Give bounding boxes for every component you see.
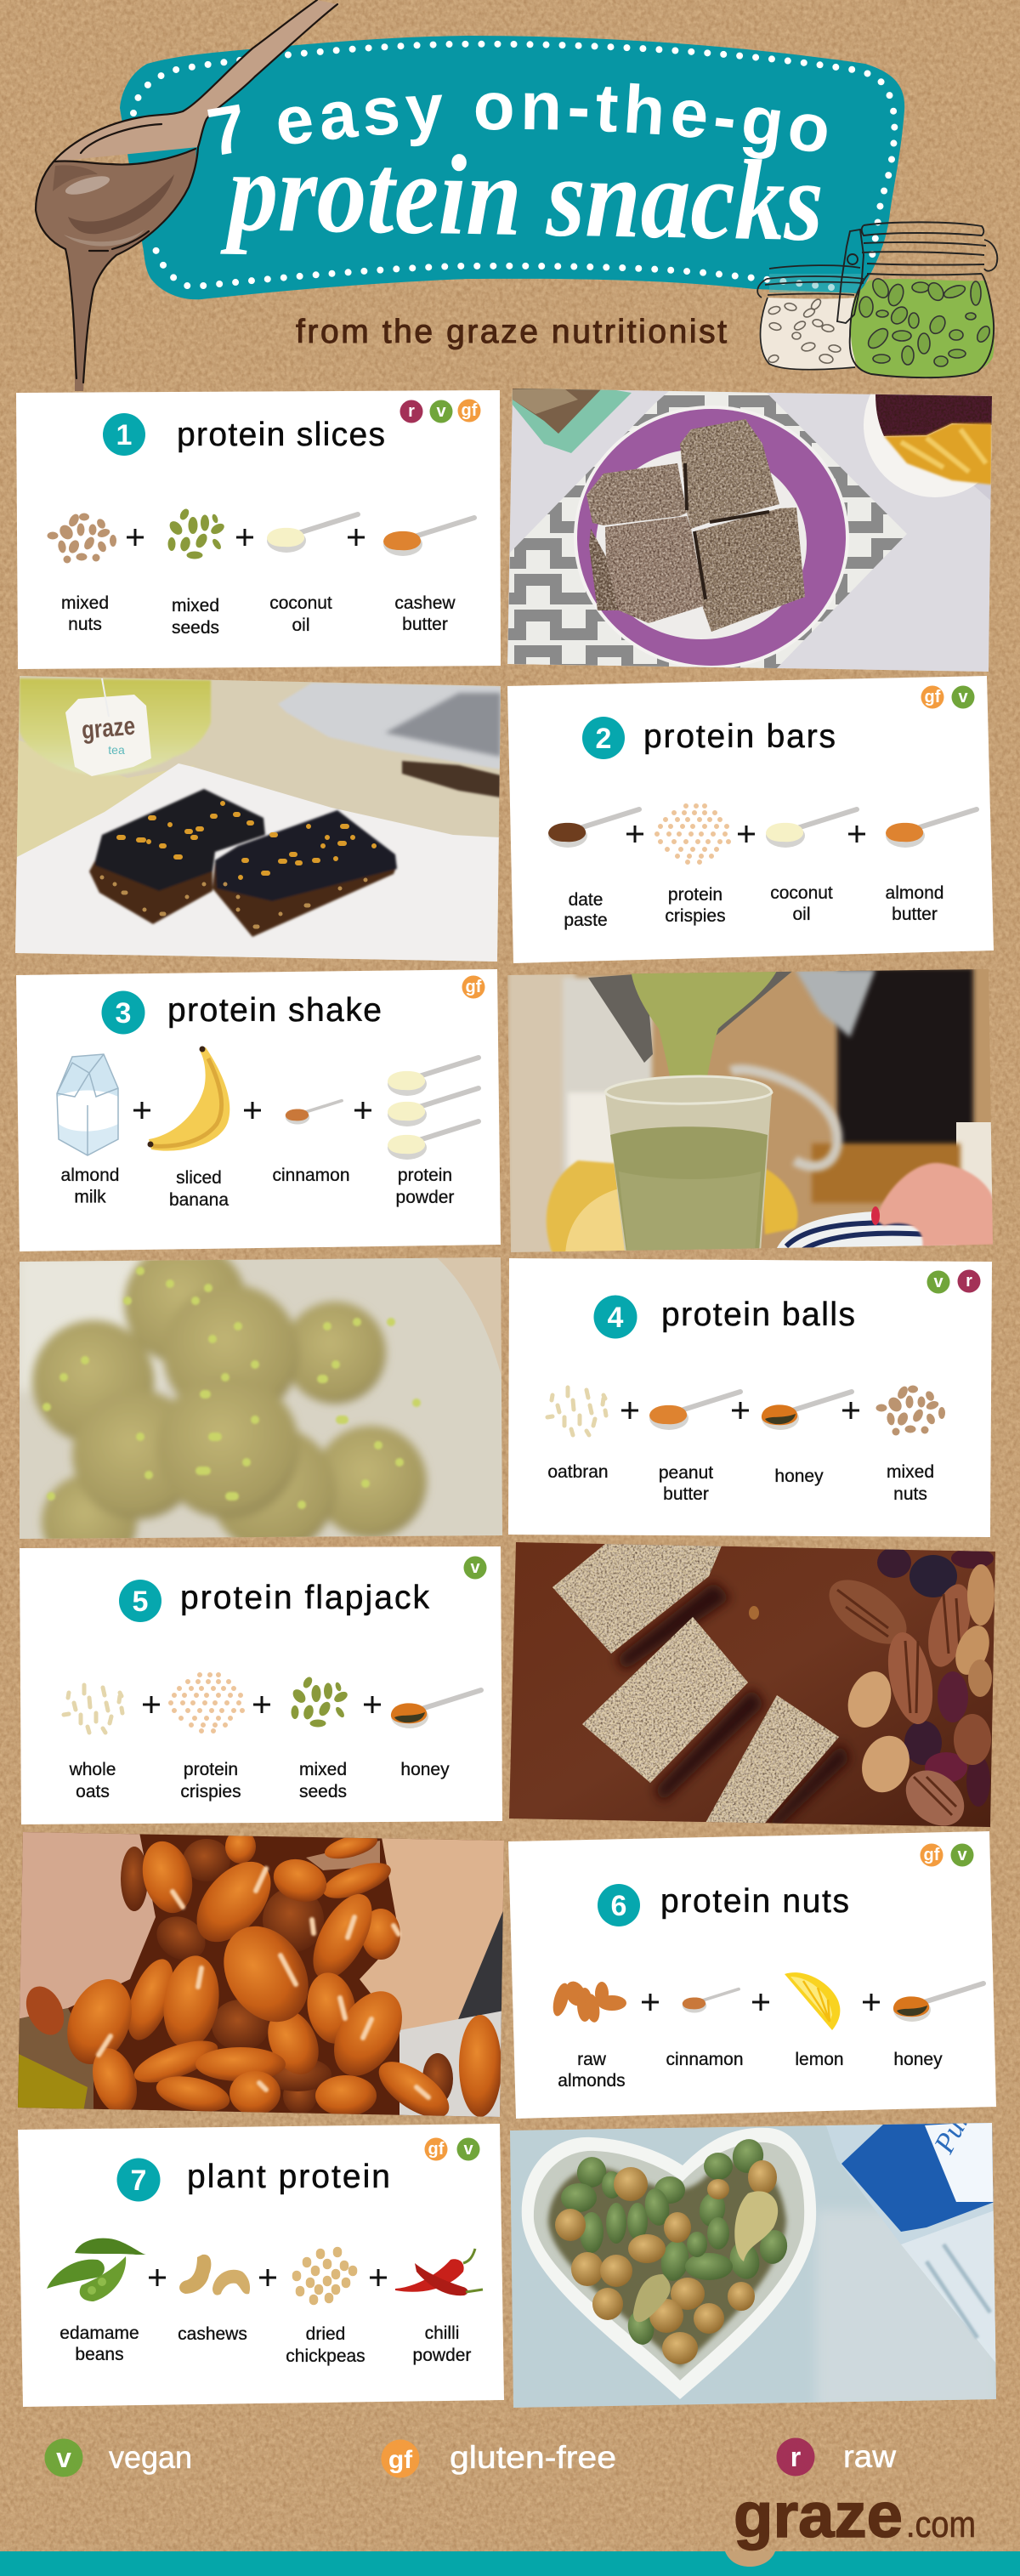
plus signs	[127, 529, 365, 546]
number 7	[117, 2158, 160, 2202]
ingredient: protein crispies	[171, 1675, 242, 1801]
ingredient: lemon	[785, 1972, 844, 2069]
number 5: 5	[133, 1586, 148, 1618]
diet badges: gf	[925, 688, 941, 706]
legend: raw: raw	[843, 2439, 896, 2474]
ingredient: oatbran: oatbran	[547, 1462, 609, 1482]
ingredient: cinnamon	[272, 1101, 350, 1185]
photo 2: protein bars on paper	[13, 674, 504, 965]
ingredient: cinnamon: cinnamon	[272, 1166, 350, 1185]
diet badges: v	[933, 1273, 944, 1291]
ingredient: chilli powder: chilli	[425, 2324, 459, 2343]
icon: spoon with dripping nut butter	[36, 0, 337, 391]
photo 3: green shake being poured	[506, 967, 997, 1258]
ingredient: protein crispies: crispies	[180, 1782, 241, 1801]
ingredient: edamame beans: edamame	[60, 2324, 139, 2343]
number 6: 6	[611, 1890, 626, 1922]
ingredient: mixed nuts: mixed	[61, 593, 109, 613]
ingredient: raw almonds: raw	[577, 2050, 607, 2069]
diet badge	[464, 1556, 486, 1580]
ingredient: coconut oil: coconut	[770, 883, 833, 903]
subtitle: from the graze nutritionist	[296, 314, 727, 350]
ingredient: protein powder: powder	[396, 1188, 454, 1207]
photo 7: roasted chickpeas and edamame in heart bowl	[510, 2123, 996, 2408]
plus signs	[626, 826, 865, 843]
number 3: 3	[116, 997, 131, 1030]
ingredient: mixed seeds	[167, 508, 226, 638]
ingredient: oatbran	[547, 1387, 609, 1482]
photo 1: protein slices on purple plate	[507, 389, 992, 672]
ingredient: sliced banana: sliced	[176, 1168, 222, 1188]
diet badges	[926, 1270, 981, 1294]
diet badges: r	[408, 402, 415, 421]
photo 5: flapjack bars and nuts on wood	[506, 1539, 999, 1837]
ingredient: coconut oil: coconut	[269, 593, 332, 613]
ingredient: almond butter	[886, 809, 977, 924]
legend: raw: r	[790, 2442, 801, 2472]
ingredient: whole oats	[64, 1685, 122, 1801]
ingredient: peanut butter: butter	[663, 1484, 709, 1504]
diet badges: v	[436, 402, 446, 421]
ingredient: peanut butter: peanut	[659, 1463, 713, 1483]
title: protein snacks	[220, 128, 824, 265]
number 6	[598, 1884, 640, 1926]
ingredient: cashews: cashews	[178, 2324, 247, 2344]
ingredient: mixed seeds: seeds	[172, 618, 219, 638]
ingredient: honey	[391, 1690, 481, 1779]
plus signs	[642, 1994, 880, 2011]
ingredient: honey: honey	[774, 1467, 824, 1486]
card 1: protein slices	[16, 390, 501, 669]
ingredient: whole oats: oats	[76, 1782, 110, 1801]
ingredient: almond milk	[57, 1054, 119, 1207]
ingredient: dried chickpeas: dried	[306, 2324, 345, 2344]
ingredient: lemon: lemon	[795, 2050, 844, 2069]
photo 2: protein bars on paper: tea	[108, 743, 125, 757]
ingredient: peanut butter	[649, 1392, 740, 1504]
plus signs	[143, 1696, 381, 1713]
plus signs	[621, 1402, 859, 1419]
title	[207, 83, 827, 265]
graze.com logo	[725, 2480, 976, 2567]
ingredient: mixed seeds: mixed	[172, 596, 219, 616]
ingredient: mixed seeds	[291, 1676, 349, 1801]
ingredient: protein crispies: protein	[184, 1760, 238, 1779]
ingredient: honey: honey	[400, 1760, 450, 1779]
ingredient: mixed seeds: mixed	[299, 1760, 347, 1779]
ingredient: raw almonds	[550, 1978, 626, 2091]
card 3: protein shake	[16, 969, 501, 1251]
ingredient: whole oats: whole	[69, 1760, 116, 1779]
legend: vegan: v	[56, 2443, 71, 2473]
ingredient: mixed nuts: mixed	[887, 1462, 934, 1482]
number 7: 7	[131, 2165, 146, 2197]
number 1	[103, 413, 145, 456]
ingredient: sliced banana	[148, 1046, 230, 1210]
ingredient: cashew butter: butter	[402, 615, 448, 634]
diet badges: v	[463, 2140, 473, 2159]
ingredient: dried chickpeas	[286, 2251, 366, 2366]
icon: large green jar	[837, 222, 997, 377]
legend: vegan: vegan	[109, 2440, 192, 2475]
ingredient: sliced banana: banana	[169, 1190, 229, 1210]
diet badges	[921, 685, 974, 709]
ingredient: protein crispies	[657, 806, 728, 926]
card 6: protein nuts	[508, 1831, 996, 2119]
ingredient: cashew butter	[383, 518, 474, 634]
ingredient: mixed nuts	[48, 513, 116, 634]
legend: gluten-free: gf	[388, 2446, 413, 2474]
diet badges: v	[958, 688, 968, 706]
diet badge: gf	[466, 978, 482, 996]
ingredient: chilli powder	[395, 2249, 483, 2365]
card 5: protein flapjack	[20, 1546, 502, 1824]
heading: protein flapjack	[180, 1580, 430, 1616]
graze.com logo: graze	[734, 2480, 903, 2550]
ingredient: mixed nuts	[876, 1385, 945, 1504]
ingredient: almond milk: milk	[74, 1187, 106, 1207]
plus signs	[149, 2269, 387, 2286]
footer teal bar	[0, 2551, 1020, 2576]
ingredient: cashew butter: cashew	[394, 593, 456, 613]
card 7: plant protein	[18, 2124, 504, 2407]
ingredient: cinnamon: cinnamon	[666, 2050, 744, 2069]
diet badges	[920, 1843, 974, 1867]
heading: protein slices	[177, 417, 385, 453]
heading: protein nuts	[660, 1883, 849, 1920]
heading: protein shake	[167, 992, 382, 1029]
ingredient: coconut oil: oil	[292, 616, 310, 635]
photo 2: protein bars on paper: graze	[81, 712, 136, 745]
photo 7: roasted chickpeas and edamame in heart bowl: Pure	[928, 2095, 983, 2159]
diet badges: gf	[428, 2140, 445, 2159]
diet badges: v	[957, 1846, 967, 1864]
ingredient: honey	[762, 1392, 852, 1486]
ingredient: cinnamon	[666, 1989, 744, 2069]
ingredient: coconut oil	[766, 809, 857, 924]
ingredient: almond milk: almond	[61, 1166, 119, 1185]
photo 6: honey glazed almonds	[15, 1828, 508, 2129]
ingredient: date paste	[548, 809, 639, 930]
ingredient: chilli powder: powder	[413, 2346, 471, 2365]
card 2: protein bars	[507, 676, 994, 963]
ingredient: almond butter: almond	[886, 883, 944, 903]
number 4: 4	[608, 1302, 624, 1334]
number 3	[102, 991, 144, 1034]
ingredient: edamame beans: beans	[75, 2345, 124, 2364]
ingredient: honey: honey	[893, 2050, 943, 2069]
legend: gluten-free	[381, 2440, 616, 2477]
ingredient: cashews	[178, 2255, 250, 2344]
diet badges	[400, 400, 481, 423]
title: 7 easy on-the-go	[207, 83, 827, 159]
ingredient: mixed seeds: seeds	[299, 1782, 347, 1801]
number 2: 2	[596, 723, 611, 755]
plus signs	[133, 1102, 371, 1119]
icon: small oat jar	[757, 265, 864, 370]
diet badge: v	[470, 1558, 480, 1577]
ingredient: edamame beans	[47, 2238, 146, 2364]
ingredient: protein powder: protein	[398, 1166, 452, 1185]
number 5	[119, 1580, 162, 1622]
diet badges: r	[966, 1272, 972, 1291]
ingredient: protein powder	[388, 1058, 479, 1207]
ingredient: date paste: paste	[564, 911, 608, 930]
ingredient: mixed nuts: nuts	[68, 615, 102, 634]
ingredient: raw almonds: almonds	[558, 2071, 626, 2091]
number 4	[593, 1296, 638, 1338]
diet badge	[462, 976, 484, 998]
card 4: protein balls	[508, 1258, 992, 1537]
ingredient: dried chickpeas: chickpeas	[286, 2346, 366, 2366]
ingredient: almond butter: butter	[892, 905, 938, 924]
ingredient: protein crispies: crispies	[665, 906, 726, 926]
number 1: 1	[116, 419, 132, 451]
diet badges: gf	[924, 1846, 940, 1864]
number 2	[582, 717, 625, 759]
legend: raw	[777, 2438, 896, 2476]
ingredient: coconut oil: oil	[792, 905, 811, 924]
legend: gluten-free: gluten-free	[450, 2440, 616, 2475]
diet badges	[425, 2137, 479, 2161]
diet badges: gf	[462, 401, 478, 420]
heading: plant protein	[187, 2159, 390, 2195]
photo 4: pistachio protein balls	[20, 1257, 502, 1539]
header banner	[120, 36, 904, 299]
ingredient: mixed nuts: nuts	[893, 1484, 927, 1504]
ingredient: protein crispies: protein	[668, 885, 722, 905]
ingredient: honey	[893, 1983, 983, 2069]
legend: vegan	[44, 2438, 192, 2477]
ingredient: coconut oil	[267, 514, 358, 635]
heading: protein bars	[643, 718, 836, 755]
graze.com logo: .com	[906, 2504, 976, 2545]
heading: protein balls	[661, 1297, 855, 1333]
ingredient: date paste: date	[569, 890, 603, 910]
